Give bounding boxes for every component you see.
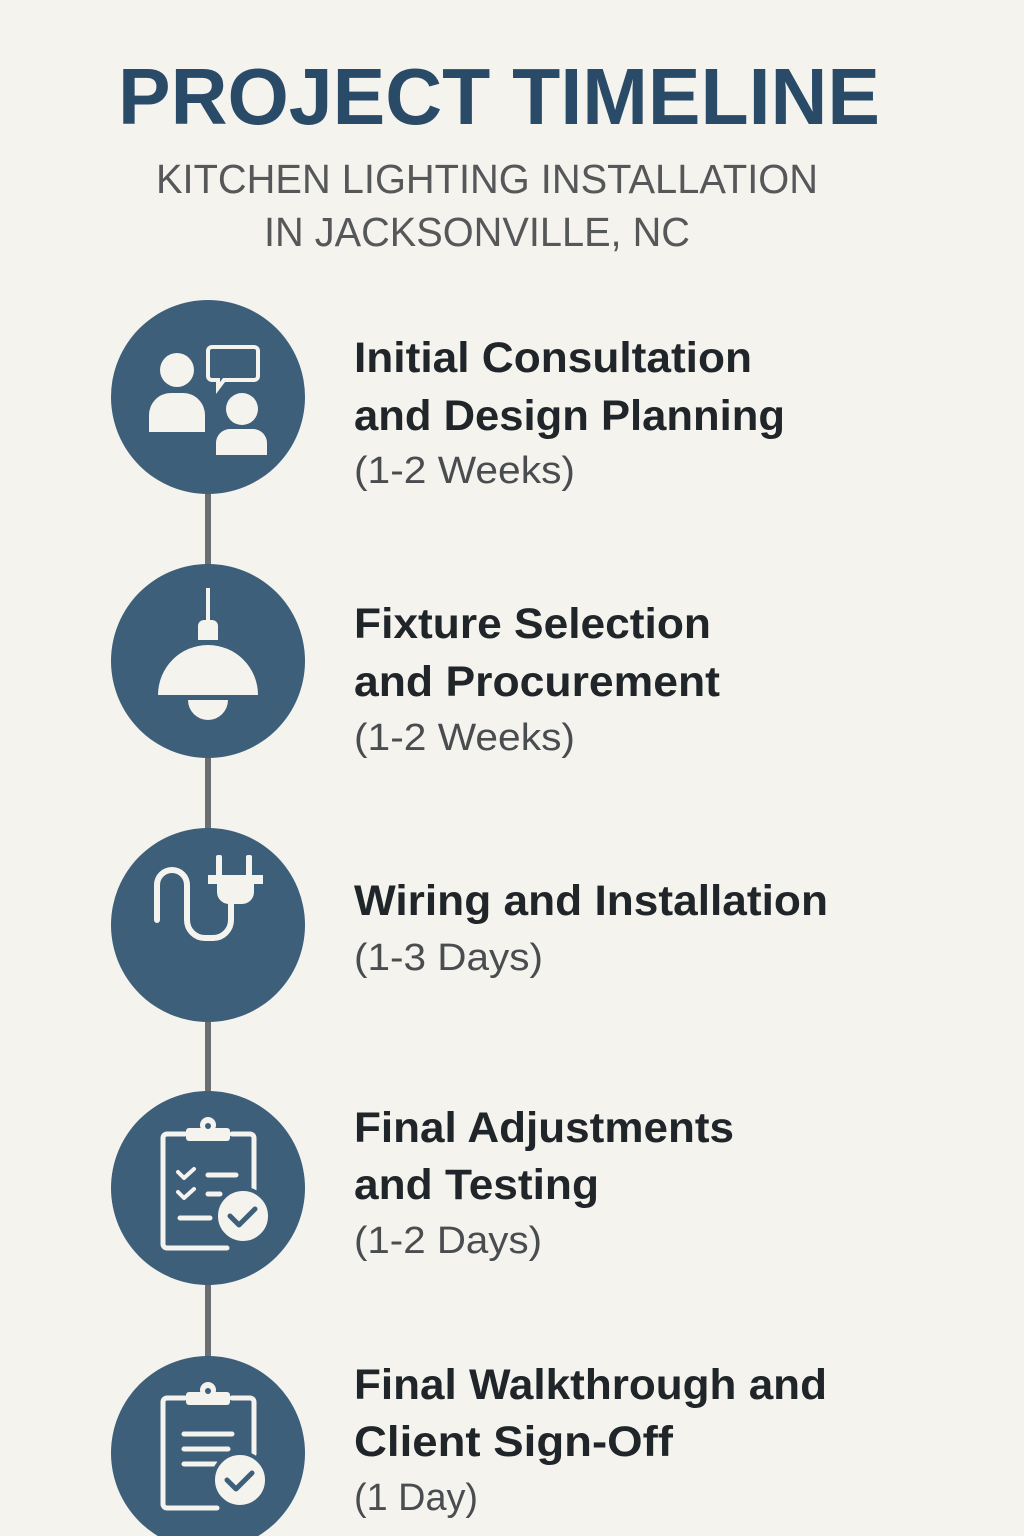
text: step 2: Fixture Selection xyxy=(354,600,711,648)
text: step 3 xyxy=(354,877,828,979)
icon: consultation xyxy=(111,300,305,494)
step 2: fixture xyxy=(111,564,720,759)
text: step 1: and Design Planning xyxy=(354,392,785,440)
text: step 4 xyxy=(354,1104,734,1262)
text: step 5: Client Sign-Off xyxy=(354,1418,674,1466)
icon: checklist clipboard xyxy=(111,1091,305,1285)
text: step 3: Wiring and Installation xyxy=(354,877,828,925)
text: step 3: (1-3 Days) xyxy=(354,937,543,979)
icon: sign-off clipboard xyxy=(111,1356,305,1536)
title: PROJECT TIMELINE xyxy=(118,52,880,141)
icon: plug xyxy=(111,828,305,1022)
text: step 1: (1-2 Weeks) xyxy=(354,450,575,492)
text: step 5 xyxy=(354,1361,827,1519)
text: step 2 xyxy=(354,600,720,759)
step 1: consultation xyxy=(111,300,785,494)
text: step 4: and Testing xyxy=(354,1161,599,1209)
step 4: testing xyxy=(111,1091,734,1285)
step 3: wiring xyxy=(111,828,828,1022)
icon: pendant lamp xyxy=(111,564,305,758)
text: step 4: (1-2 Days) xyxy=(354,1220,542,1262)
subtitle: KITCHEN LIGHTING INSTALLATION xyxy=(156,156,818,202)
subtitle xyxy=(156,156,818,255)
text: step 1: Initial Consultation xyxy=(354,334,752,382)
text: step 5: Final Walkthrough and xyxy=(354,1361,827,1409)
text: step 2: (1-2 Weeks) xyxy=(354,717,575,759)
text: step 1 xyxy=(354,334,785,492)
text: step 4: Final Adjustments xyxy=(354,1104,734,1152)
text: step 5: (1 Day) xyxy=(354,1477,478,1519)
step 5: sign-off xyxy=(111,1356,827,1536)
subtitle: IN JACKSONVILLE, NC xyxy=(264,209,690,255)
text: step 2: and Procurement xyxy=(354,658,720,706)
timeline connector line xyxy=(205,397,211,1457)
